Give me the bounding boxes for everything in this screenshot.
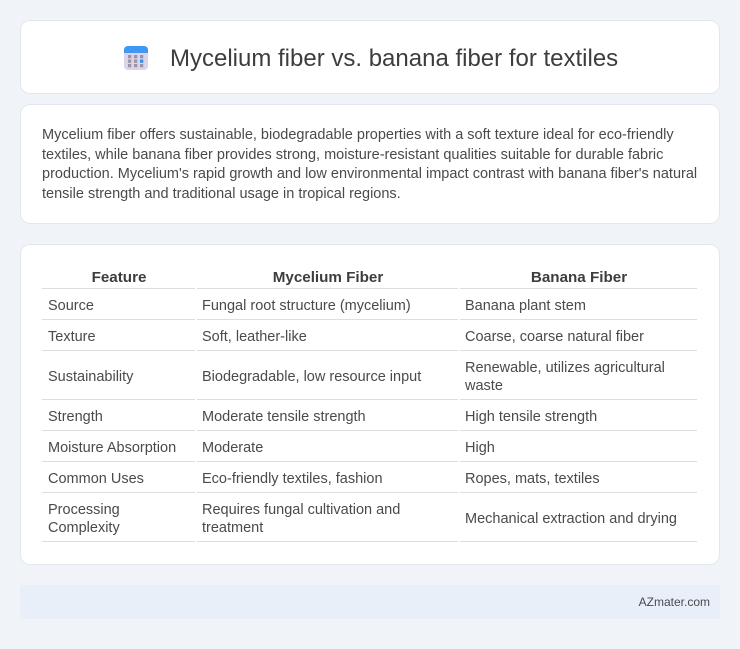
row: sustainability bbox=[48, 360, 665, 394]
row: texture bbox=[48, 329, 644, 345]
row: strength: Strength bbox=[48, 409, 103, 425]
row: strength bbox=[48, 409, 597, 425]
header row: Banana Fiber bbox=[531, 269, 627, 286]
title card bbox=[20, 20, 720, 94]
header row bbox=[92, 269, 627, 286]
row: processing complexity: Mechanical extraction and drying bbox=[465, 511, 677, 527]
row: sustainability: Biodegradable, low resource input bbox=[202, 369, 421, 385]
row: texture: Soft, leather-like bbox=[202, 329, 307, 345]
row: moisture absorption: Moderate bbox=[202, 440, 263, 456]
intro text: tensile strength and traditional usage in tropical regions. bbox=[42, 186, 401, 202]
row: processing complexity: treatment bbox=[202, 520, 263, 536]
row: source: Source bbox=[48, 298, 94, 314]
title: Mycelium fiber vs. banana fiber for textiles bbox=[170, 45, 618, 72]
row: source: Fungal root structure (mycelium) bbox=[202, 298, 411, 314]
row: common uses: Ropes, mats, textiles bbox=[465, 471, 600, 487]
row: texture: Texture bbox=[48, 329, 96, 345]
comparison table bbox=[42, 269, 697, 542]
intro text: Mycelium fiber offers sustainable, biodegradable properties with a soft texture ideal for eco-friendly bbox=[42, 127, 674, 143]
intro text: textiles, while banana fiber provides strong, moisture-resistant qualities suitable for durable fabric bbox=[42, 147, 663, 163]
row: moisture absorption: Moisture Absorption bbox=[48, 440, 176, 456]
row: moisture absorption: High bbox=[465, 440, 495, 456]
row: processing complexity: Complexity bbox=[48, 520, 120, 536]
row: processing complexity: Processing bbox=[48, 502, 120, 518]
row: strength: Moderate tensile strength bbox=[202, 409, 366, 425]
header row: Mycelium Fiber bbox=[273, 269, 383, 286]
row: sustainability: Renewable, utilizes agricultural bbox=[465, 360, 665, 376]
row: source bbox=[48, 298, 586, 314]
row: processing complexity bbox=[48, 502, 677, 536]
row: source: Banana plant stem bbox=[465, 298, 586, 314]
row: sustainability: Sustainability bbox=[48, 369, 133, 385]
intro text bbox=[42, 127, 697, 202]
row: texture: Coarse, coarse natural fiber bbox=[465, 329, 644, 345]
row: processing complexity: Requires fungal cultivation and bbox=[202, 502, 400, 518]
icon: calendar bbox=[124, 46, 148, 70]
footer bar bbox=[20, 585, 720, 619]
intro text: production. Mycelium's rapid growth and low environmental impact contrast with banana fiber's natural bbox=[42, 166, 697, 182]
row: common uses bbox=[48, 471, 600, 487]
panel: comparison table bbox=[20, 244, 720, 565]
row: sustainability: waste bbox=[465, 378, 503, 394]
row: common uses: Eco-friendly textiles, fashion bbox=[202, 471, 383, 487]
header row: Feature bbox=[92, 269, 146, 286]
intro panel bbox=[20, 104, 720, 224]
row: moisture absorption bbox=[48, 440, 495, 456]
footer text: AZmater.com bbox=[639, 595, 710, 609]
row: strength: High tensile strength bbox=[465, 409, 597, 425]
row: common uses: Common Uses bbox=[48, 471, 144, 487]
